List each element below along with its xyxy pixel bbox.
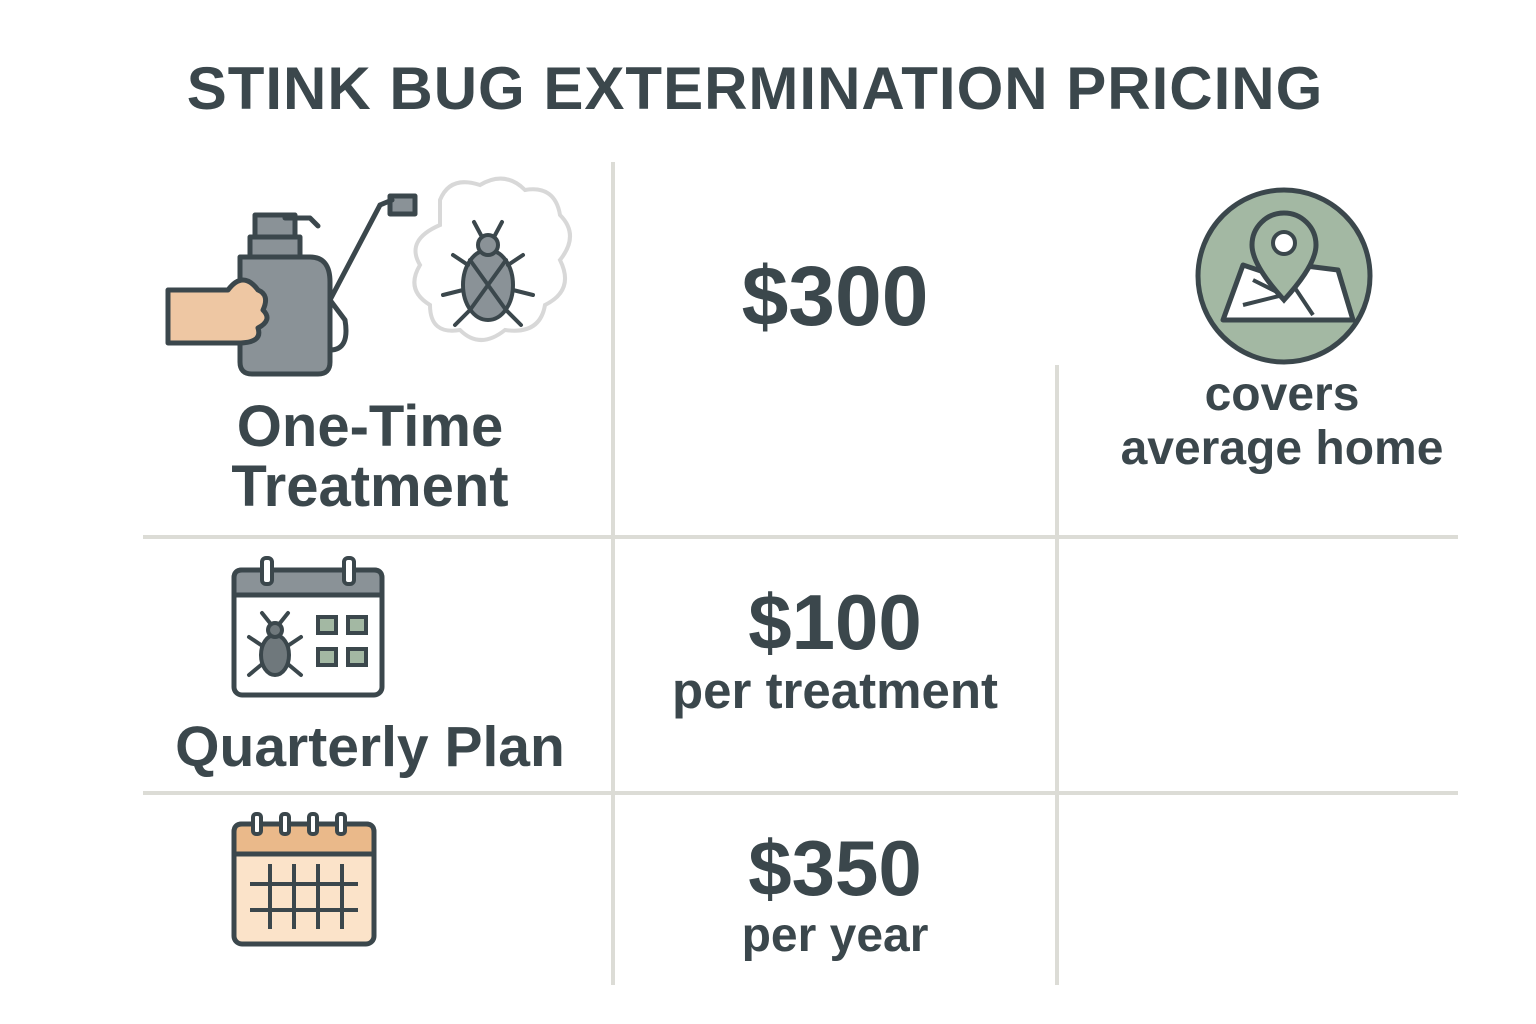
text: covers average home (1121, 368, 1443, 475)
icon: quarterly calendar (232, 556, 384, 698)
text: Quarterly Plan: Quarterly Plan (175, 715, 565, 779)
text: covers average home: average home (1121, 422, 1443, 475)
text: One-Time Treatment: Treatment (231, 454, 509, 519)
icon: sprayer with hand (166, 176, 572, 376)
price: $100 per treatment (672, 578, 998, 719)
price: $350 per year: $350 (748, 824, 922, 912)
price: $300: $300 (742, 249, 928, 343)
price: $100 per treatment: per treatment (672, 662, 998, 719)
price: $100 per treatment: $100 (748, 578, 922, 666)
icon: map pin (1196, 188, 1372, 364)
title: STINK BUG EXTERMINATION PRICING (187, 55, 1323, 122)
icon: annual calendar (232, 812, 376, 946)
text: One-Time Treatment (231, 394, 509, 519)
text: covers average home: covers (1205, 368, 1359, 421)
price: $350 per year: per year (742, 909, 928, 962)
text: One-Time Treatment: One-Time (237, 394, 503, 459)
price: $350 per year (742, 824, 928, 962)
